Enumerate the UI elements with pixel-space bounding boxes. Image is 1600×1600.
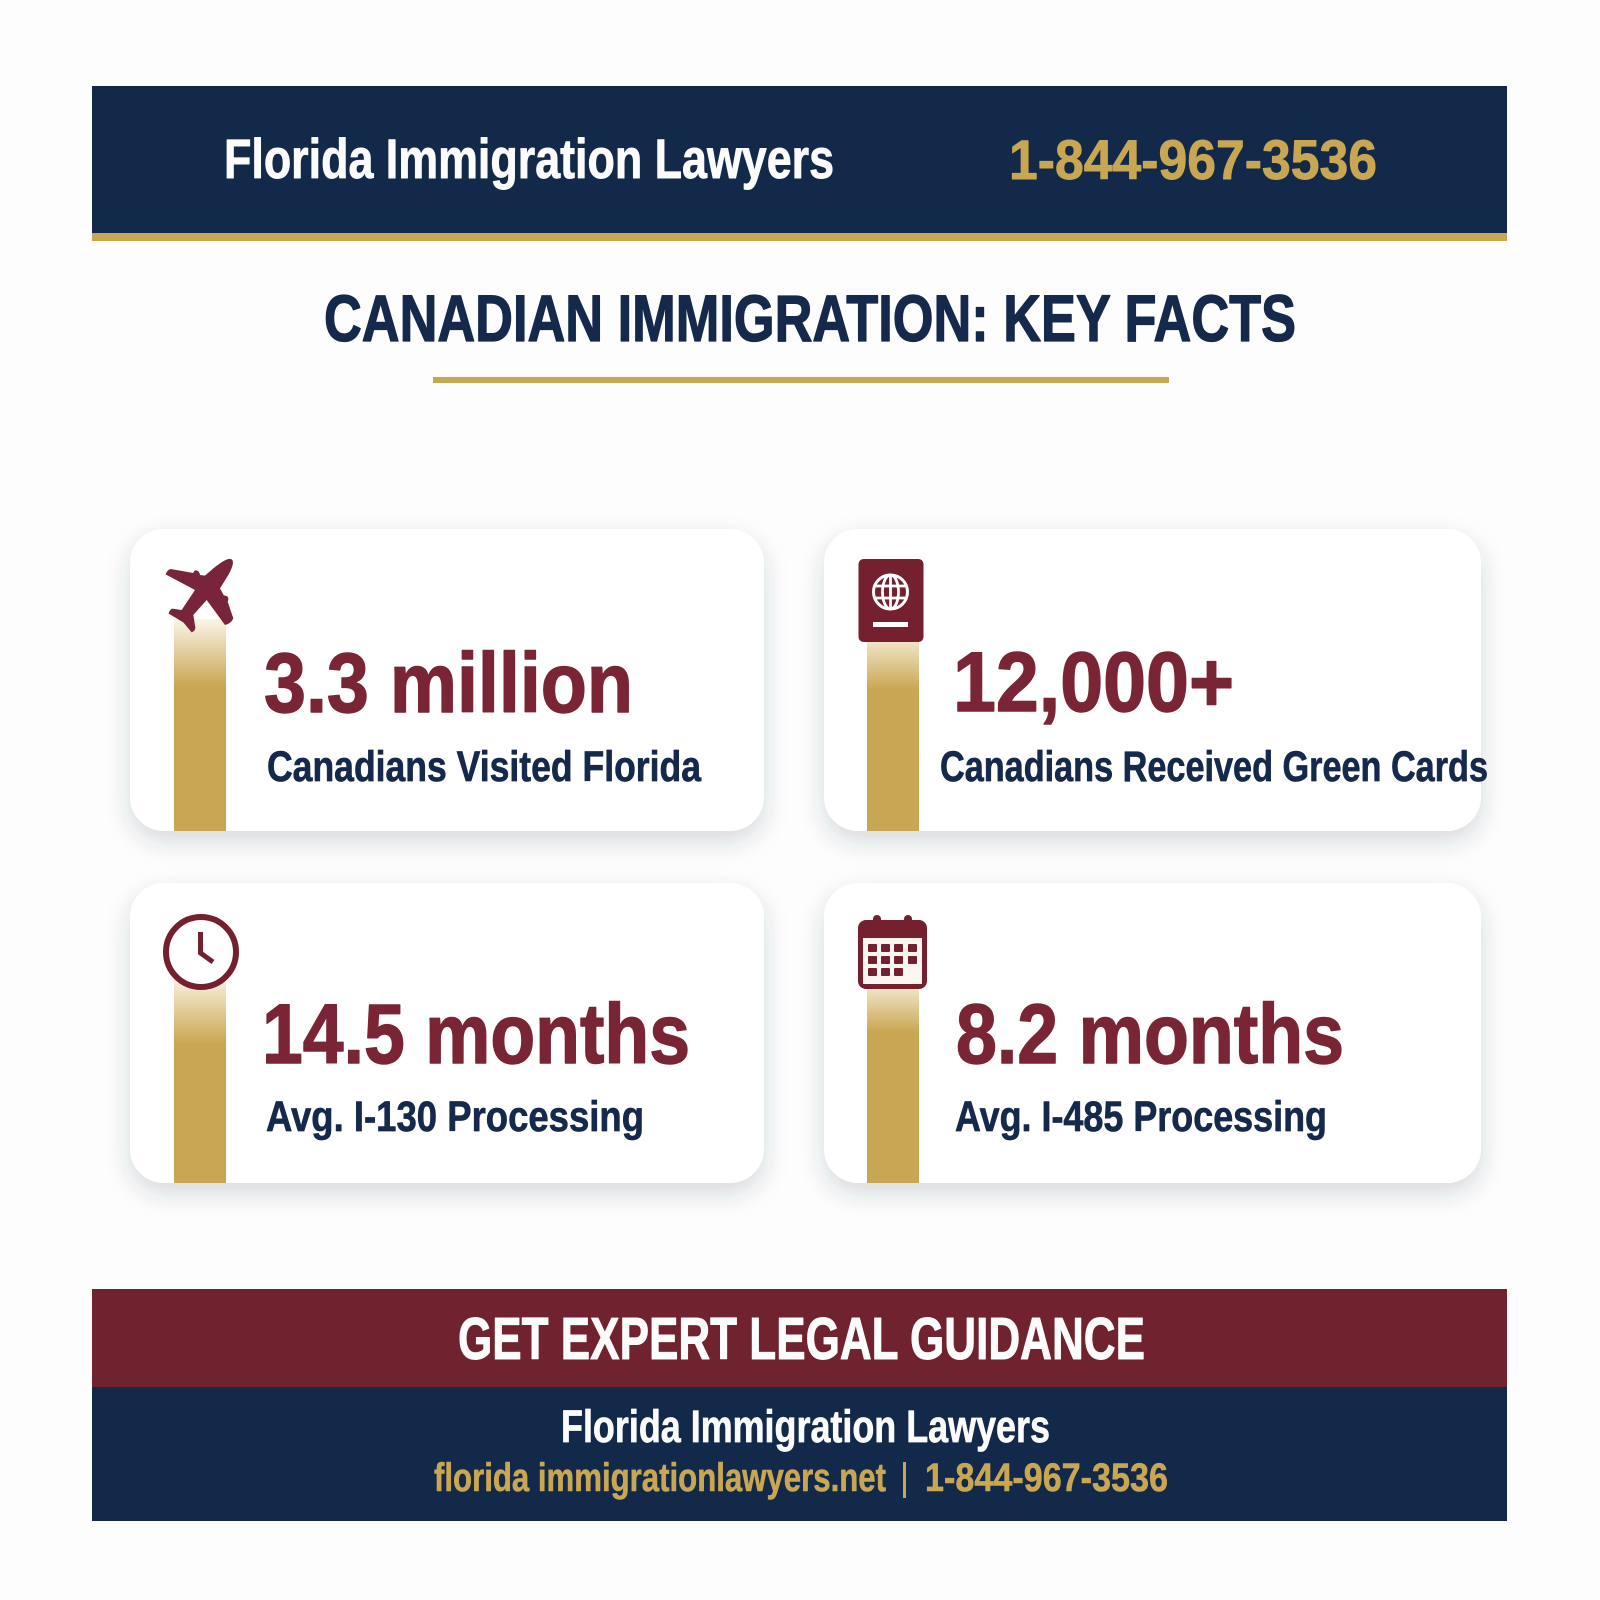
header firm name: Florida Immigration Lawyers (224, 127, 834, 190)
panel: 14.5 months I-130 (130, 883, 764, 1183)
icon: airplane (166, 559, 233, 632)
panel: 12,000+ green cards (824, 529, 1488, 831)
header banner (92, 86, 1507, 241)
footer phone number: 1-844-967-3536 (925, 1456, 1168, 1500)
stat label: Canadians Visited Florida (267, 743, 702, 791)
gold bar (867, 641, 919, 831)
footer firm name: Florida Immigration Lawyers (561, 1401, 1050, 1452)
stat label: Avg. I-485 Processing (955, 1093, 1327, 1141)
footer website: florida immigrationlawyers.net (434, 1456, 886, 1500)
call to action heading: GET EXPERT LEGAL GUIDANCE (458, 1306, 1145, 1372)
stat value: 12,000+ (953, 635, 1234, 729)
stat value: 8.2 months (956, 987, 1344, 1081)
footer separator (903, 1462, 906, 1498)
icon: passport (858, 559, 924, 642)
icon: clock (166, 917, 236, 987)
stat value: 3.3 million (264, 636, 633, 730)
gold bar (174, 619, 226, 831)
gold bar (867, 988, 919, 1183)
title underline (433, 377, 1169, 383)
panel: 8.2 months I-485 (824, 883, 1481, 1183)
stat label: Avg. I-130 Processing (266, 1093, 644, 1141)
header phone number: 1-844-967-3536 (1009, 128, 1377, 191)
footer contact panel (92, 1387, 1507, 1521)
icon: calendar (858, 915, 927, 989)
title: CANADIAN IMMIGRATION: KEY FACTS (324, 281, 1296, 355)
panel: 3.3 million visitors (130, 529, 764, 831)
stat value: 14.5 months (262, 987, 690, 1081)
gold bar (174, 978, 226, 1183)
footer call to action banner (92, 1289, 1507, 1387)
